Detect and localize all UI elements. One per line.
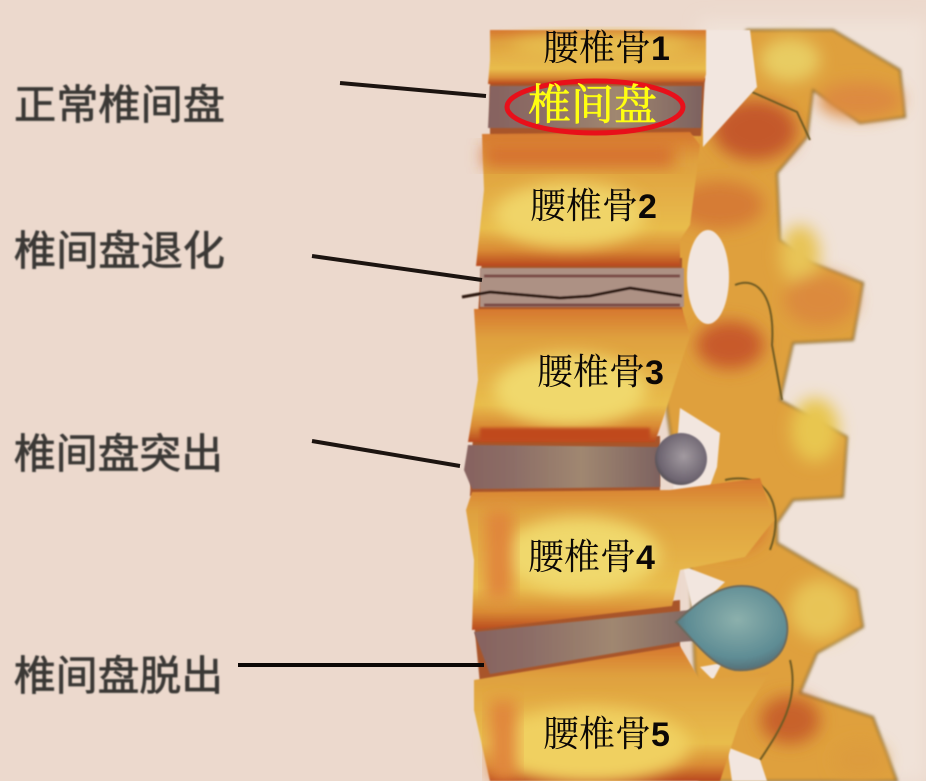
label: disc prolapse: 椎间盘脱出 <box>14 653 223 699</box>
foramen openings <box>672 30 767 781</box>
posterior processes <box>650 30 905 781</box>
disc 2 degeneration <box>462 268 684 307</box>
leader line: prolapse <box>238 663 484 667</box>
label: disc protrusion: 椎间盘突出 <box>14 431 223 477</box>
label: lumbar 1: 腰椎骨1 <box>543 28 670 68</box>
label: lumbar 4: 腰椎骨4 <box>528 537 655 577</box>
label: lumbar 2: 腰椎骨2 <box>530 186 657 226</box>
vertebra 4 <box>466 478 774 630</box>
facet joint contours <box>725 92 810 760</box>
disc 4 herniation <box>474 586 787 674</box>
vertebra 5 <box>474 646 770 781</box>
background lighter right side <box>700 20 926 781</box>
callout: red ellipse around disc <box>507 81 683 133</box>
process shading <box>676 38 902 778</box>
callout text: disc: 椎间盘 <box>528 83 657 130</box>
leader line: normal disc <box>340 83 486 96</box>
disc gap underlay <box>470 78 705 684</box>
vertebra 1 <box>488 30 706 84</box>
label: disc degeneration: 椎间盘退化 <box>14 228 225 274</box>
leader line: protrusion <box>312 441 460 466</box>
spine illustration <box>462 30 905 781</box>
leader line: degeneration <box>312 256 482 280</box>
disc 1 <box>488 86 702 128</box>
vertebra 2 <box>476 132 700 266</box>
label: lumbar 5: 腰椎骨5 <box>543 714 670 754</box>
vertebra 3 <box>468 309 690 442</box>
disc 3 protrusion <box>464 433 707 489</box>
label: normal disc: 正常椎间盘 <box>14 82 225 128</box>
label: lumbar 3: 腰椎骨3 <box>537 352 664 392</box>
